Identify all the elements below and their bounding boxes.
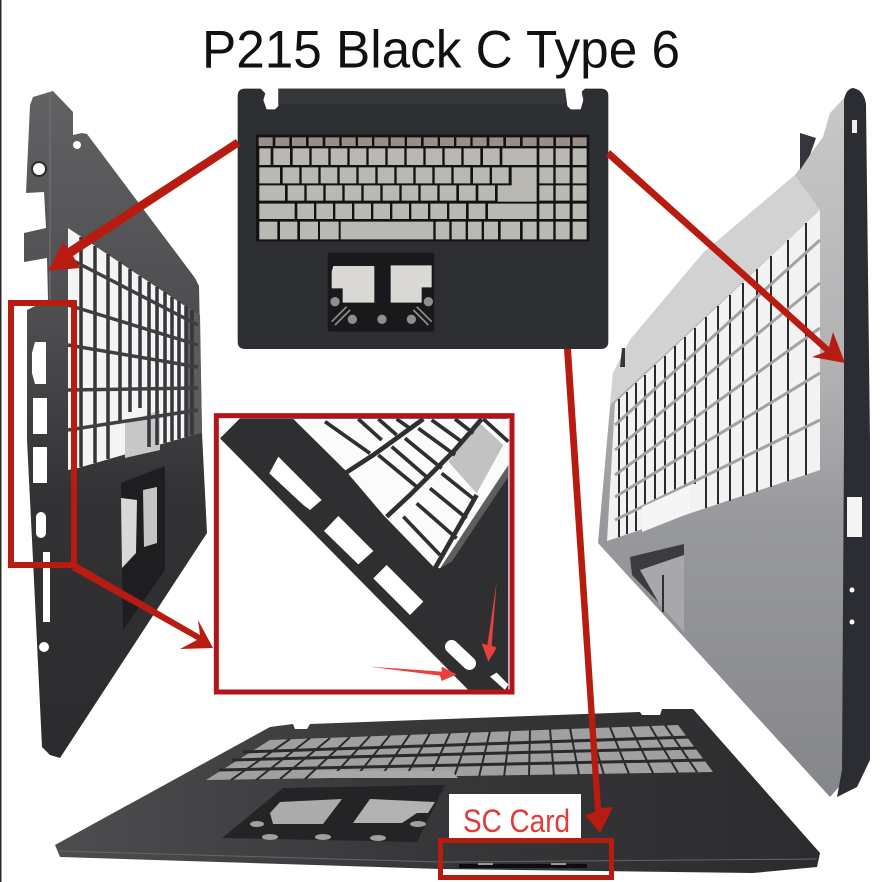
inset palmrest edge [220,418,508,690]
callout: SC Card label: SC Card [463,803,570,839]
left panel keyboard opening [68,228,202,470]
callout: card slot box [440,840,612,878]
front panel body [55,709,820,873]
left panel ports [32,141,81,652]
right panel dark edge [837,88,870,797]
callout: SC Card label [449,794,581,839]
arrow: top view to left view [48,139,240,271]
panel: left side view of palmrest [24,91,207,758]
keyboard key cutouts [259,148,587,239]
inset: zoomed port detail [216,416,512,692]
arrow: top view to right view [606,150,845,363]
inset red frame [216,416,512,692]
inset keyboard opening [293,419,508,568]
left panel touchpad opening [121,466,165,630]
arrow: port box to inset [72,563,213,649]
panel: front view of palmrest [55,709,820,873]
left panel body [24,91,207,758]
callout: port region box on left view [11,303,74,565]
front panel keyboard [206,725,713,780]
front panel touchpad opening [222,785,445,842]
panel: right side view of palmrest [598,88,870,797]
arrow: top view to card slot [564,349,613,833]
keyboard opening [256,135,589,241]
inset small red arrows [370,582,497,681]
top panel body [238,89,608,349]
right panel touchpad opening [630,544,684,632]
title: P215 Black C Type 6 [202,20,680,80]
inset port holes [269,457,508,690]
front panel card slot [459,863,587,868]
touchpad opening [328,253,434,332]
right panel keyboard opening [607,210,820,541]
inset frame background [217,416,512,692]
function key row [259,137,587,146]
right panel hinge tabs [620,133,816,367]
right panel body [598,97,846,797]
panel: top view of palmrest [238,89,608,349]
